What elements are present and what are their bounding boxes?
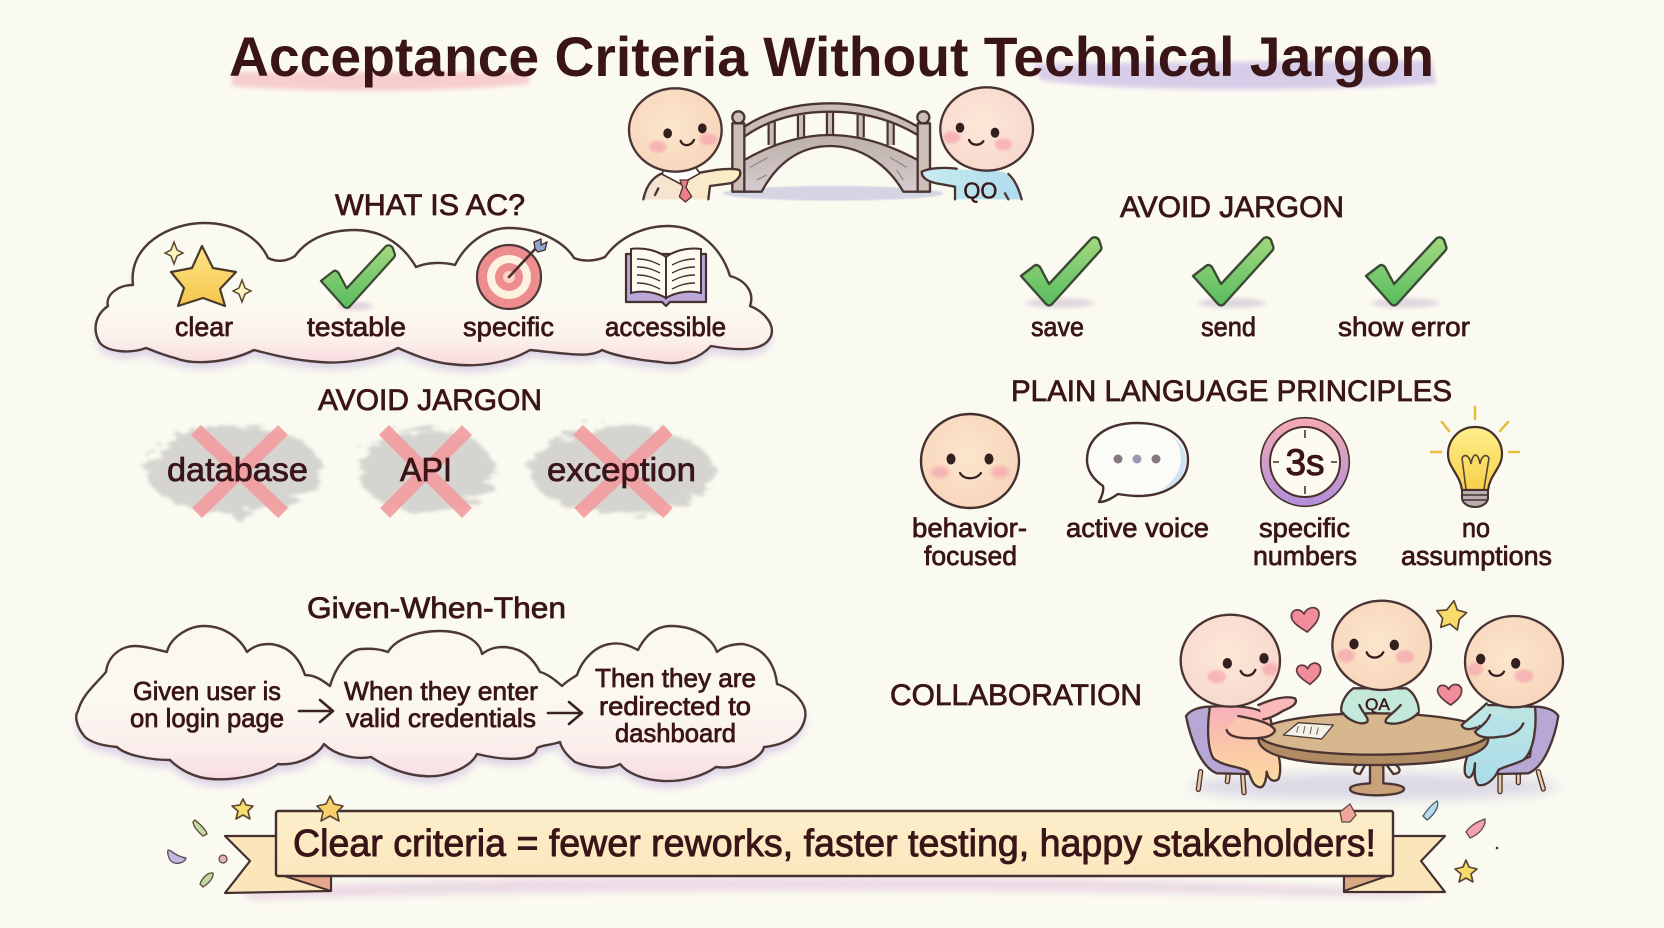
- bridge shadow: [723, 186, 943, 201]
- title highlight: purple: [1034, 60, 1436, 90]
- panel: what is AC cloud: [96, 223, 772, 372]
- heading: what is AC: WHAT IS AC?: [335, 189, 525, 222]
- right character: [922, 87, 1033, 203]
- panel: given-when-then clouds: [76, 626, 805, 788]
- panel: plain language principles: [912, 407, 1552, 571]
- cloud chain outline: [76, 626, 805, 781]
- left person arms: [1227, 697, 1296, 738]
- title: [229, 25, 1436, 91]
- step: when: When they enter: [344, 676, 538, 706]
- label: no assumptions: no: [1462, 513, 1490, 543]
- label: specific numbers: specific: [1259, 513, 1350, 543]
- banner text: Clear criteria = fewer reworks, faster testing, happy stakeholders!: [293, 823, 1376, 865]
- heading: collaboration: COLLABORATION: [890, 679, 1142, 712]
- label: testable: testable: [307, 312, 406, 342]
- label: behavior-focused: [912, 513, 1027, 571]
- heading: plain language principles: PLAIN LANGUAGE PRINCIPLES: [1011, 375, 1452, 408]
- middle person body: [1341, 688, 1419, 714]
- jargon item: API: API: [400, 451, 452, 488]
- heading: given when then: Given-When-Then: [307, 592, 566, 625]
- title text: Acceptance Criteria Without Technical Jargon: [229, 25, 1434, 88]
- paper on table: [1283, 723, 1333, 739]
- jargon item: database: [146, 426, 322, 514]
- QA shirt text: QA: [1365, 695, 1391, 714]
- icon: smiling face: [921, 414, 1019, 508]
- check item: send: send: [1201, 312, 1256, 342]
- hearts and star: [1291, 601, 1467, 705]
- panel: plain words with checks: [1021, 237, 1470, 342]
- check item: save: save: [1031, 312, 1084, 342]
- right person arms: [1462, 703, 1523, 738]
- heading: avoid jargon right: AVOID JARGON: [1120, 191, 1344, 224]
- bridge: [732, 103, 930, 192]
- label: behavior-focused: focused: [924, 541, 1017, 571]
- step: given: on login page: [130, 703, 284, 733]
- left person head: [1181, 615, 1280, 707]
- right person head: [1465, 616, 1563, 707]
- icon: speech bubble: [1087, 423, 1188, 502]
- banner right tail: [1344, 836, 1445, 892]
- banner right fold: [1344, 874, 1393, 891]
- middle person hands: [1343, 703, 1418, 724]
- cloud outline: [96, 223, 772, 365]
- banner ribbon: [276, 811, 1393, 876]
- label: behavior-focused: behavior-: [912, 513, 1027, 543]
- left chair: [1186, 707, 1247, 793]
- illustration: team around a table: [1181, 601, 1563, 801]
- icon: light bulb: [1431, 407, 1519, 507]
- icon: 3s timer: 3s: [1285, 442, 1325, 483]
- table: [1258, 713, 1488, 795]
- step: then: dashboard: [615, 718, 736, 748]
- step: given: [130, 676, 284, 733]
- cloud shadow: [76, 633, 805, 788]
- step: then: [595, 663, 756, 748]
- banner left fold: [278, 874, 331, 891]
- check item: show error: [1338, 237, 1470, 342]
- right chair: [1498, 707, 1558, 792]
- step: when: [344, 676, 538, 733]
- floor shadow: [1188, 773, 1558, 801]
- label: no assumptions: [1401, 513, 1552, 571]
- step: then: redirected to: [599, 691, 751, 721]
- label: accessible: accessible: [605, 312, 726, 342]
- title highlight: pink: [232, 72, 530, 91]
- jargon item: exception: exception: [547, 451, 696, 488]
- step: given: Given user is: [133, 676, 281, 706]
- label: no assumptions: assumptions: [1401, 541, 1552, 571]
- heading: avoid jargon left: AVOID JARGON: [318, 384, 542, 417]
- cloud shadow: [96, 230, 772, 372]
- step: then: Then they are: [595, 663, 756, 693]
- label: specific: specific: [463, 312, 554, 342]
- banner: [225, 811, 1445, 900]
- label: specific numbers: [1253, 513, 1357, 571]
- check item: save: [1021, 237, 1101, 342]
- icon: star with sparkles: [165, 242, 251, 306]
- label: clear: clear: [175, 312, 233, 342]
- label: specific numbers: numbers: [1253, 541, 1357, 571]
- icon: open book: [626, 248, 706, 306]
- left person body: [1208, 706, 1280, 787]
- arrow: when to then: [548, 702, 582, 724]
- step: when: valid credentials: [346, 703, 536, 733]
- jargon item: API: [358, 428, 494, 513]
- left character: [629, 88, 740, 202]
- icon: target with arrow: [477, 239, 547, 309]
- panel: crossed-out jargon words: [146, 426, 713, 514]
- confetti and stars: [168, 796, 1498, 887]
- jargon item: exception: [529, 426, 713, 514]
- check item: show error: show error: [1338, 312, 1470, 342]
- arrow: given to when: [299, 700, 333, 722]
- icon: 3s timer: [1261, 418, 1349, 506]
- label: active voice: active voice: [1066, 513, 1209, 543]
- jargon item: database: database: [167, 451, 308, 488]
- check item: send: [1193, 237, 1273, 342]
- banner left tail: [225, 836, 331, 893]
- banner shadow: [240, 877, 1440, 900]
- QO shirt text: QO: [963, 177, 997, 203]
- middle person head: [1332, 601, 1431, 690]
- bridge illustration with two characters: [629, 87, 1033, 203]
- right person body: [1465, 705, 1536, 785]
- icon: green check: [321, 245, 395, 310]
